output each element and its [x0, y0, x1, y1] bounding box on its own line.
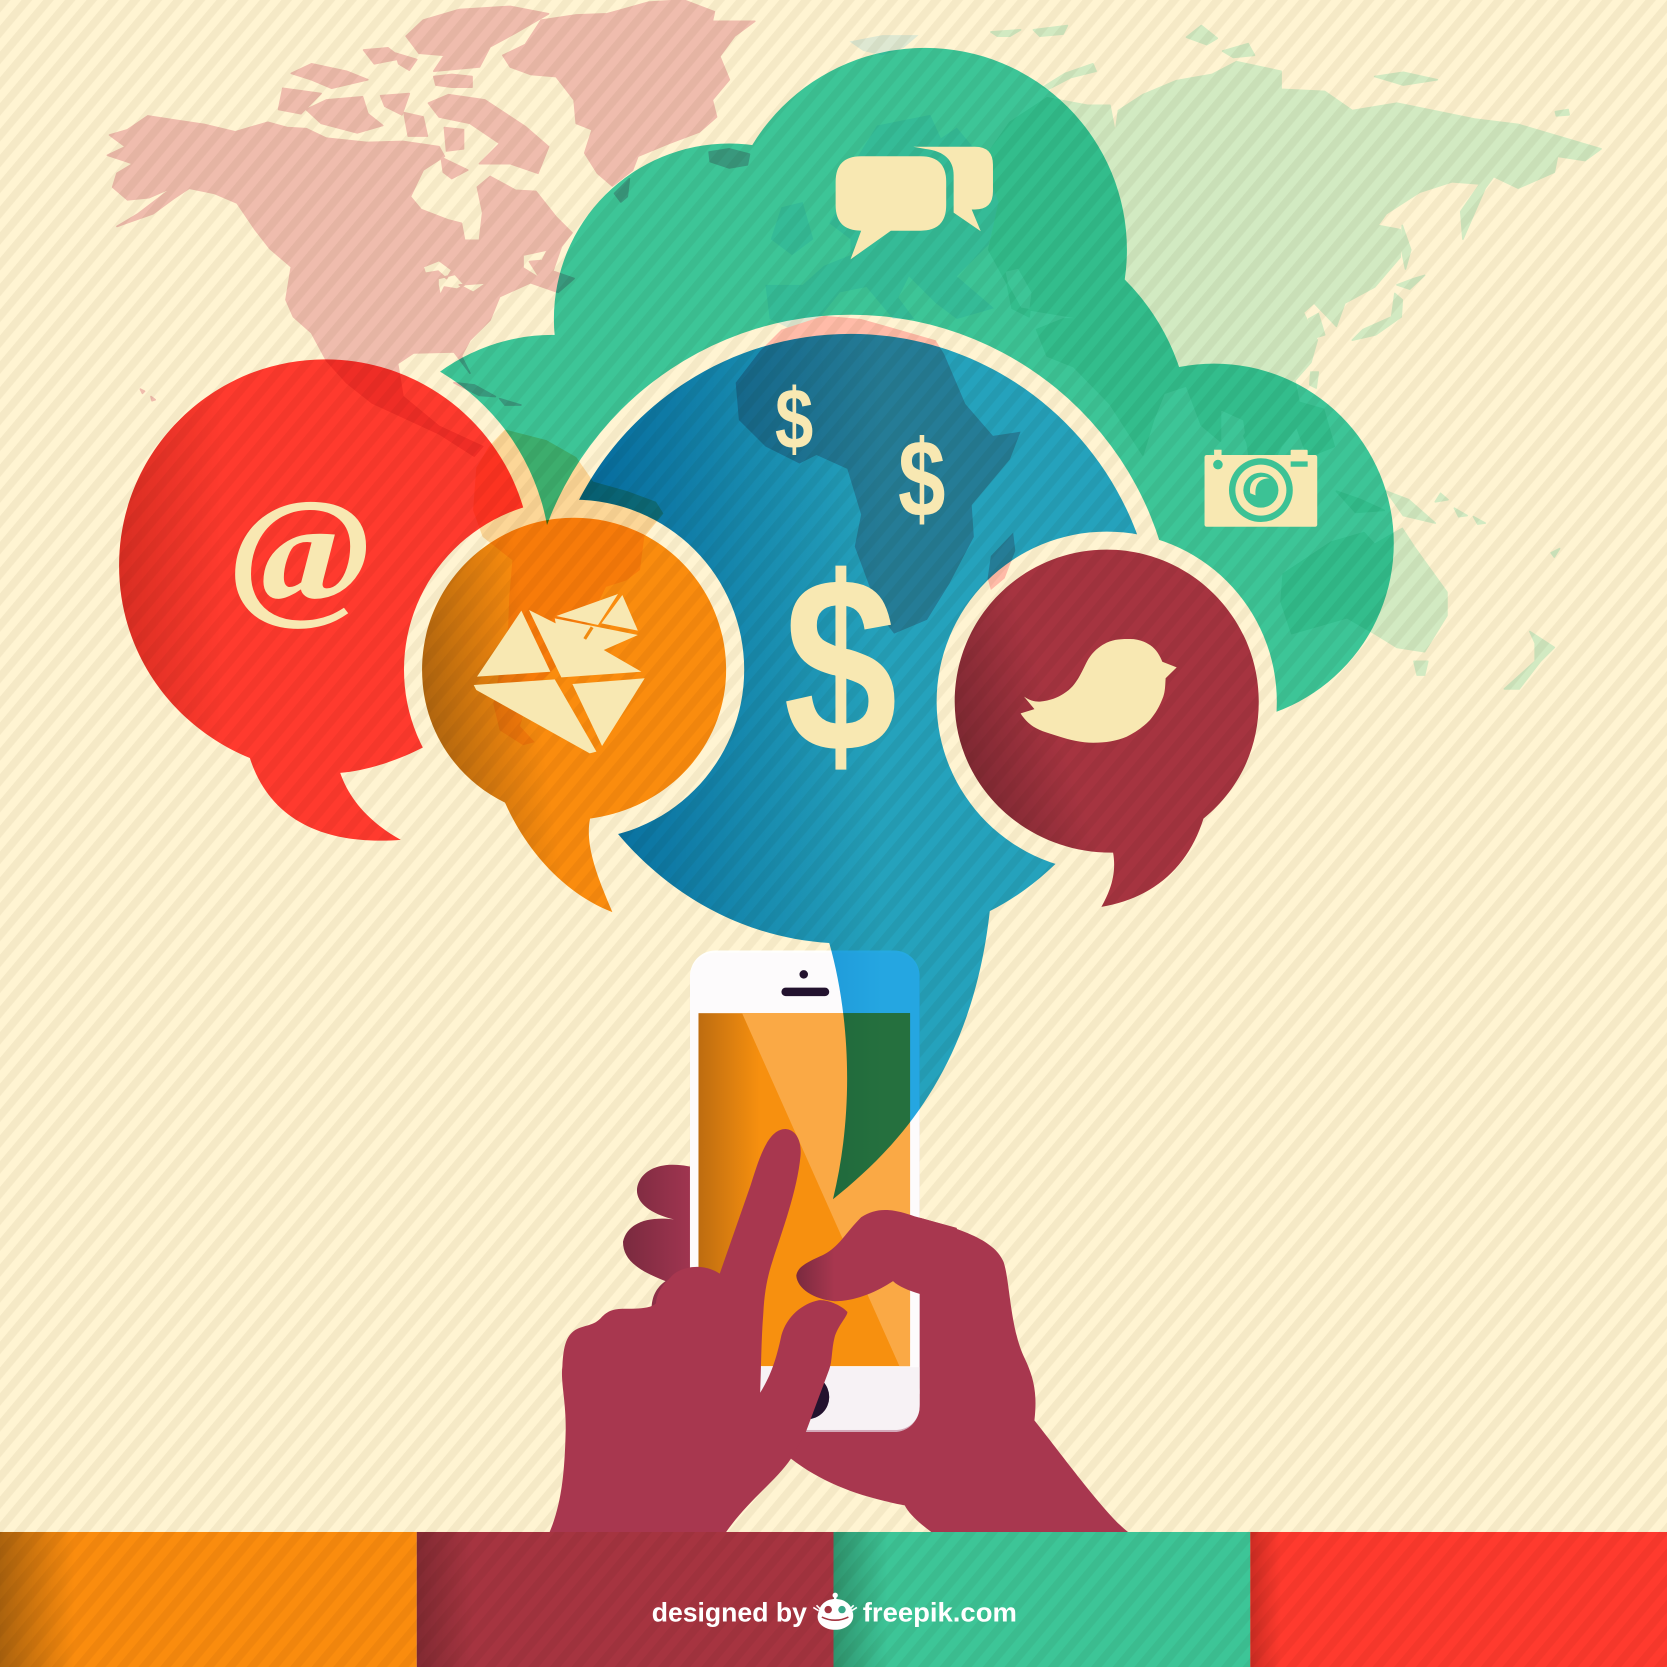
- speech bubble: orange: [422, 518, 726, 912]
- icon: envelopes: [474, 594, 645, 753]
- world map: [107, 0, 1601, 745]
- icon: at sign: @: [231, 469, 371, 633]
- map: South America: [473, 430, 663, 745]
- palm of right hand: [791, 1210, 1128, 1532]
- map: Europe: [765, 35, 999, 330]
- speech bubble: green cloud: [361, 48, 1394, 723]
- icon: small dollar left: $: [775, 370, 813, 467]
- footer credit: [652, 1593, 1017, 1630]
- speech bubble: red: [119, 359, 532, 841]
- color band at the bottom: [0, 1532, 1667, 1667]
- phone screen: [698, 1013, 910, 1366]
- icon: chat bubbles: [836, 147, 993, 259]
- speech bubble: blue: [545, 334, 1156, 1199]
- phone and the fingers behind it: [623, 950, 1128, 1532]
- icon: small dollar right: $: [898, 417, 945, 540]
- map: North America and Greenland: [107, 0, 755, 456]
- right hand thumb: [796, 1210, 957, 1318]
- phone home button: [785, 1375, 829, 1419]
- phone body: [690, 950, 920, 1432]
- phone screen highlight: [742, 1013, 910, 1366]
- phone speaker: [781, 988, 829, 996]
- left hand with pointing finger: [550, 1129, 847, 1532]
- map: Africa: [736, 316, 1021, 634]
- footer text: freepik.com: freepik.com: [863, 1597, 1017, 1627]
- icon: freepik logo: [813, 1593, 857, 1630]
- icon: camera: [1205, 450, 1317, 527]
- phone camera dot: [799, 970, 808, 979]
- footer text: designed by: designed by: [652, 1597, 807, 1627]
- hands in front of the phone: [550, 1129, 957, 1532]
- icon: large dollar: $: [783, 526, 897, 805]
- icon: bird: [1021, 639, 1177, 743]
- map: Asia and Oceania: [983, 26, 1601, 689]
- speech bubble: maroon bird: [955, 550, 1259, 907]
- back fingers of left hand: [623, 1165, 702, 1314]
